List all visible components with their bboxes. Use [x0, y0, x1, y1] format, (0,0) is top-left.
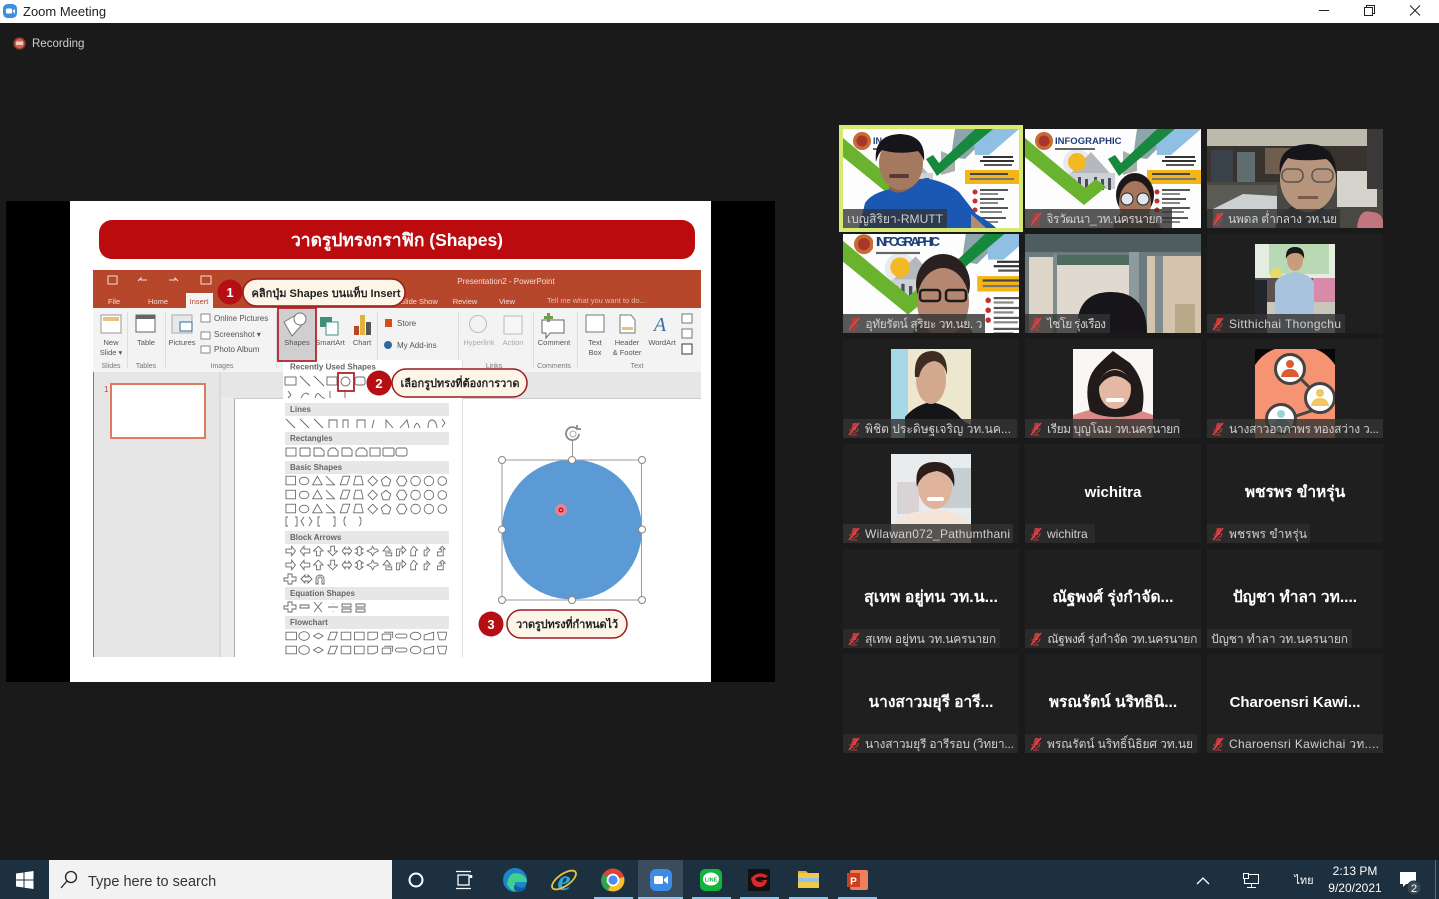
ribbon labels: Shapes [284, 338, 310, 347]
tile: participant 5 [1025, 234, 1201, 333]
tile: participant 9: นางสาวอาภาพร ทองสว่าง ว... [1229, 422, 1379, 436]
icon: powerpoint [847, 870, 868, 890]
callout 3 [478, 610, 627, 638]
system tray: 9/20/2021 [1328, 881, 1382, 895]
ribbon icons: A [652, 314, 667, 336]
tile: Charoensri [1207, 654, 1383, 753]
tile: wichitra: wichitra [1046, 527, 1088, 541]
tile: Charoensri: Charoensri Kawichai วท.... [1229, 737, 1379, 751]
ribbon labels: Box [589, 348, 602, 357]
ribbon labels: Store [397, 319, 417, 328]
equation row [284, 602, 365, 612]
ribbon labels: Links [486, 363, 503, 370]
tile: พชรพร: พชรพร ขำหรุ่น [1229, 527, 1307, 542]
powerpoint ribbon: Presentation2 - PowerPoint [457, 277, 555, 286]
window controls [1319, 6, 1420, 16]
ribbon labels: Text [588, 338, 603, 347]
callout 1: 1 [226, 285, 234, 300]
icon: powerpoint: P [850, 876, 857, 888]
shapes dropdown menu: Basic Shapes [290, 463, 343, 472]
icon: edge [503, 868, 527, 892]
shapes button highlight [278, 308, 316, 361]
shapes dropdown menu: Block Arrows [290, 533, 342, 542]
active speaker highlight [839, 125, 1023, 232]
ribbon labels: & Footer [613, 348, 642, 357]
tile: participant 2: INFOGRAPHIC [1055, 136, 1122, 147]
tile: ปัญชา: ปัญชา ทำลา วท.... [1233, 588, 1357, 606]
ribbon labels: Chart [353, 338, 372, 347]
windows taskbar [0, 860, 1439, 899]
tile: participant 3 [1207, 129, 1383, 228]
selected shape highlight [338, 373, 354, 391]
ribbon labels: Action [503, 338, 523, 347]
icon: game client [748, 869, 770, 891]
icon: task view [456, 872, 471, 888]
recording indicator: Recording [32, 38, 84, 50]
shapes dropdown menu: Recently Used Shapes [290, 362, 376, 372]
ribbon labels: Hyperlink [463, 338, 495, 347]
tile: participant 8 [1025, 339, 1201, 438]
system tray [1197, 860, 1436, 899]
tile: พชรพร: พชรพร ขำหรุ่น [1245, 483, 1346, 502]
icon: line [700, 869, 722, 891]
icon: cortana [410, 874, 422, 886]
title bar [0, 0, 1439, 23]
powerpoint ribbon: Tell me what you want to do... [547, 296, 646, 305]
ribbon labels: Slide ▾ [100, 348, 122, 357]
ribbon labels: Screenshot ▾ [214, 330, 261, 339]
ribbon labels: WordArt [648, 338, 677, 347]
shapes dropdown menu: Lines [290, 405, 311, 414]
icon: windows start [16, 871, 34, 889]
ribbon labels: Online Pictures [214, 314, 268, 323]
tile: พชรพร [1207, 444, 1383, 543]
tile: speaker: เบญสิริยา-RMUTT [847, 212, 944, 226]
shapes dropdown menu [283, 360, 463, 657]
system tray: 2 [1411, 883, 1417, 895]
tile: participant 2: จิรวัฒนา_วท.นครนายก [1046, 212, 1162, 226]
system tray: 2:13 PM [1333, 864, 1377, 878]
powerpoint ribbon: Home [148, 297, 168, 306]
slide thumbnail: 1 [104, 385, 109, 394]
active app underlines [594, 897, 877, 899]
tile: wichitra: wichitra [1084, 484, 1142, 501]
ribbon labels: Slides [101, 363, 121, 370]
block arrows rows [284, 546, 445, 584]
ribbon labels: Table [137, 338, 155, 347]
tile: นางสาวมยุรี: นางสาวมยุรี อารีรอบ (วิทยา... [865, 737, 1014, 752]
tile: participant 2 [1025, 129, 1201, 228]
flowchart rows [286, 632, 447, 654]
tile: ปัญชา: ปัญชา ทำลา วท.นครนายก [1211, 632, 1348, 646]
ribbon labels: Tables [136, 363, 157, 370]
tile: นางสาวมยุรี: นางสาวมยุรี อารี... [869, 693, 993, 712]
tile: participant 4: อุทัยรัตน์ สุริยะ วท.นย. ว [865, 317, 982, 332]
tile: participant 4 [843, 231, 1037, 340]
panel: participant gallery [839, 125, 1383, 753]
tile: wichitra [1025, 444, 1201, 543]
tile: participant 4: INFOGRAPHIC [876, 234, 941, 249]
icon: zoom active [638, 860, 683, 899]
search box: Type here to search [88, 874, 216, 890]
window title: Zoom Meeting [23, 4, 106, 19]
basic shapes rows [286, 476, 447, 526]
callout 2: เลือกรูปทรงที่ต้องการวาด [400, 375, 520, 391]
recent shapes [285, 376, 365, 398]
slide title banner [99, 220, 695, 259]
tile: ณัฐพงศ์: ณัฐพงศ์ รุ่งกำจัด... [1053, 588, 1173, 607]
ribbon labels [100, 314, 677, 370]
tile: ปัญชา [1207, 549, 1383, 648]
ribbon icons [101, 309, 692, 360]
callout 1: คลิกปุ่ม Shapes บนแท็บ Insert [252, 286, 401, 301]
icon: internet explorer [549, 864, 579, 897]
tile: สุเทพ: สุเทพ อยู่ทน วท.นครนายก [865, 632, 996, 647]
powerpoint workspace [93, 372, 701, 657]
tile: participant 6 [1207, 234, 1383, 333]
ribbon labels: My Add-ins [397, 341, 437, 350]
ribbon labels: Text [631, 363, 643, 370]
ribbon labels: New [103, 338, 119, 347]
shapes dropdown menu: Equation Shapes [290, 589, 355, 598]
ribbon labels: SmartArt [315, 338, 346, 347]
powerpoint ribbon: View [499, 297, 516, 306]
tile: participant 5: ไชโย รุ่งเรือง [1046, 317, 1106, 332]
shapes dropdown menu: Flowchart [290, 618, 328, 627]
ribbon labels: Comment [538, 338, 571, 347]
tile: พรณรัตน์ [1025, 654, 1201, 753]
callout 3: วาดรูปทรงที่กำหนดไว้ [516, 616, 618, 632]
panel: shared slide [6, 201, 775, 682]
search box [49, 860, 392, 899]
tile: พรณรัตน์: พรณรัตน์ นริทธิ์นิธิยศ วท.นย [1047, 735, 1193, 751]
tile: speaker: IN [873, 136, 882, 146]
ribbon labels: Header [615, 338, 640, 347]
ribbon labels: Pictures [168, 338, 196, 347]
tile: สุเทพ [843, 549, 1019, 648]
tile: speaker [843, 129, 1019, 228]
icon: file explorer [798, 871, 819, 888]
tile: participant 9 [1207, 339, 1383, 438]
tile: participant 10: Wilawan072_Pathumthani [865, 527, 1010, 541]
tile: นางสาวมยุรี [843, 654, 1019, 753]
tile: สุเทพ: สุเทพ อยู่ทน วท.น... [864, 589, 998, 608]
tile: participant 6: Sitthichai Thongchu [1229, 317, 1341, 331]
tile: participant 8: เรียม บุญโฉม วท.นครนายก [1047, 422, 1180, 437]
slide thumbnail [104, 384, 205, 438]
shapes dropdown menu: Rectangles [290, 434, 333, 443]
powerpoint ribbon [93, 270, 701, 372]
tile: participant 10 [843, 444, 1019, 543]
powerpoint ribbon: File [108, 297, 120, 306]
powerpoint ribbon: Insert [190, 297, 209, 306]
ribbon labels: Comments [537, 363, 571, 370]
icon: chrome [601, 868, 624, 892]
tile: participant 7 [843, 339, 1019, 438]
callout 2 [366, 369, 527, 397]
powerpoint ribbon: Review [453, 297, 478, 306]
icon: line: LINE [705, 878, 718, 884]
tile: Charoensri: Charoensri Kawi... [1230, 694, 1360, 711]
icon: zoom logo [3, 4, 17, 18]
tile: ณัฐพงศ์ [1025, 549, 1201, 648]
drawn circle shape [498, 425, 646, 604]
callout 2: 2 [375, 376, 383, 391]
lines row [286, 419, 445, 428]
icon: internet explorer: e [557, 864, 571, 897]
tile: ณัฐพงศ์: ณัฐพงศ์ รุ่งกำจัด วท.นครนายก [1047, 632, 1197, 647]
slide title banner: วาดรูปทรงกราฟิก (Shapes) [291, 230, 503, 252]
tile: พรณรัตน์: พรณรัตน์ นริทธินิ... [1049, 693, 1177, 711]
rectangles row [286, 448, 407, 456]
ribbon labels: Photo Album [214, 345, 260, 354]
callout 3: 3 [487, 617, 495, 632]
tile: participant 7: พิชิต ประดิษฐเจริญ วท.นค... [865, 422, 1011, 436]
powerpoint ribbon: Slide Show [400, 297, 438, 306]
tile: participant 3: นพดล ต่ำกลาง วท.นย [1228, 210, 1337, 226]
system tray: ไทย [1293, 874, 1314, 887]
callout 1 [218, 279, 405, 306]
ribbon labels: Images [211, 363, 234, 370]
